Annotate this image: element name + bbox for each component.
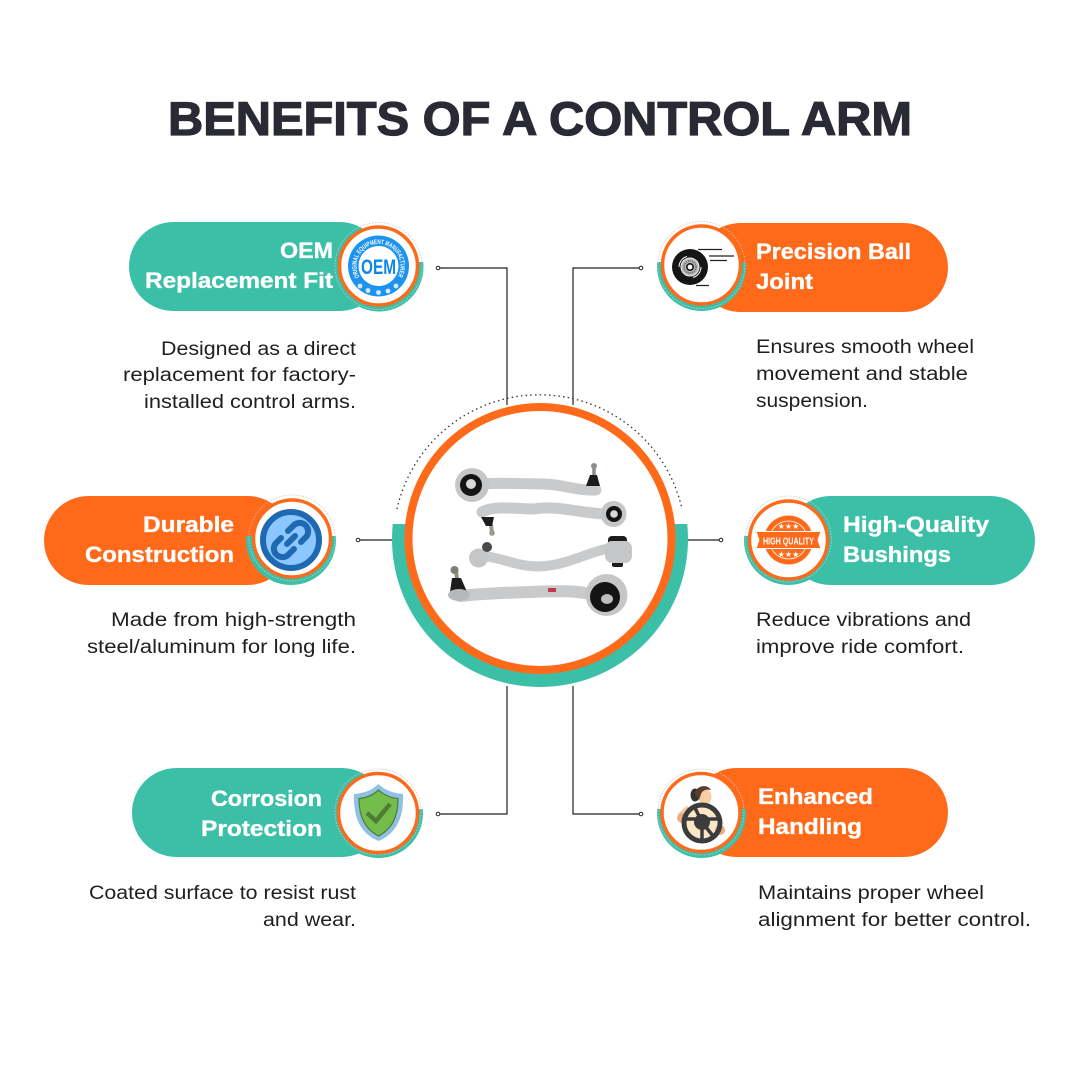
teal half ring (392, 524, 688, 687)
description: Designed as a direct (161, 339, 357, 360)
panel: Enhanced Handling (657, 768, 1031, 931)
icon: high quality seal: HIGH QUALITY (763, 536, 814, 548)
arm 4 (448, 566, 628, 616)
description: Made from high-strength (111, 610, 356, 631)
description: suspension. (756, 391, 868, 412)
heading (758, 784, 873, 839)
heading (201, 786, 322, 841)
panel: High-Quality Bushings (744, 496, 1035, 658)
description: movement and stable (756, 364, 968, 385)
heading: Corrosion (211, 786, 322, 811)
connector lines (356, 266, 723, 816)
pill (132, 768, 386, 857)
arm 2 (481, 501, 626, 536)
arm 3 (469, 536, 632, 568)
heading: Enhanced (758, 784, 873, 809)
arm 1 (455, 463, 600, 502)
control arms (448, 463, 632, 616)
heading (756, 239, 911, 294)
description: installed control arms. (144, 392, 356, 413)
icon: high quality seal (744, 496, 833, 585)
description: replacement for factory- (123, 365, 356, 386)
panel: Precision Ball Joint (657, 222, 974, 412)
heading: OEM (280, 238, 333, 263)
icon: OEM badge: ORIGINAL EQUIPMENT MANUFACTURER (352, 239, 406, 278)
description: Maintains proper wheel (758, 883, 984, 904)
dotted arc (397, 395, 682, 509)
heading: Protection (201, 816, 322, 841)
panel: Corrosion Protection (89, 768, 423, 931)
icon: spinning wheel (657, 222, 746, 311)
orange ring (408, 407, 672, 670)
heading: Bushings (843, 542, 951, 567)
heading (145, 238, 334, 293)
central product graphic (392, 391, 688, 687)
title: BENEFITS OF A CONTROL ARM (168, 92, 912, 145)
pill (786, 496, 1035, 585)
icon: high quality seal: ★★★ (778, 522, 799, 531)
pill (129, 222, 384, 311)
icon: OEM badge: OEM (361, 256, 396, 279)
icon: chain link (246, 495, 336, 585)
icon: driver at steering wheel (657, 769, 746, 858)
heading (843, 512, 990, 567)
pill (692, 768, 948, 857)
heading: Durable (143, 512, 234, 537)
description: alignment for better control. (758, 910, 1031, 931)
description: Reduce vibrations and (756, 610, 971, 631)
heading: Replacement Fit (145, 268, 334, 293)
pill (44, 496, 292, 585)
heading: Precision Ball (756, 239, 911, 264)
panel: OEM Replacement Fit (123, 222, 424, 413)
heading (85, 512, 234, 567)
description (89, 883, 357, 931)
heading: High-Quality (843, 512, 990, 537)
heading: Construction (85, 542, 234, 567)
panel: Durable Construction (44, 495, 356, 658)
description: improve ride comfort. (756, 637, 964, 658)
heading: Handling (758, 814, 862, 839)
description: steel/aluminum for long life. (87, 637, 356, 658)
description: and wear. (263, 910, 356, 931)
description: Ensures smooth wheel (756, 337, 974, 358)
description (756, 337, 974, 412)
description (123, 339, 357, 413)
description (87, 610, 356, 658)
heading: Joint (756, 269, 814, 294)
icon: high quality seal: ★★★ (778, 550, 799, 559)
icon: shield with check (334, 769, 423, 858)
pill (696, 223, 948, 312)
description (758, 883, 1031, 931)
icon: OEM badge (334, 222, 424, 312)
description: Coated surface to resist rust (89, 883, 357, 904)
description (756, 610, 971, 658)
